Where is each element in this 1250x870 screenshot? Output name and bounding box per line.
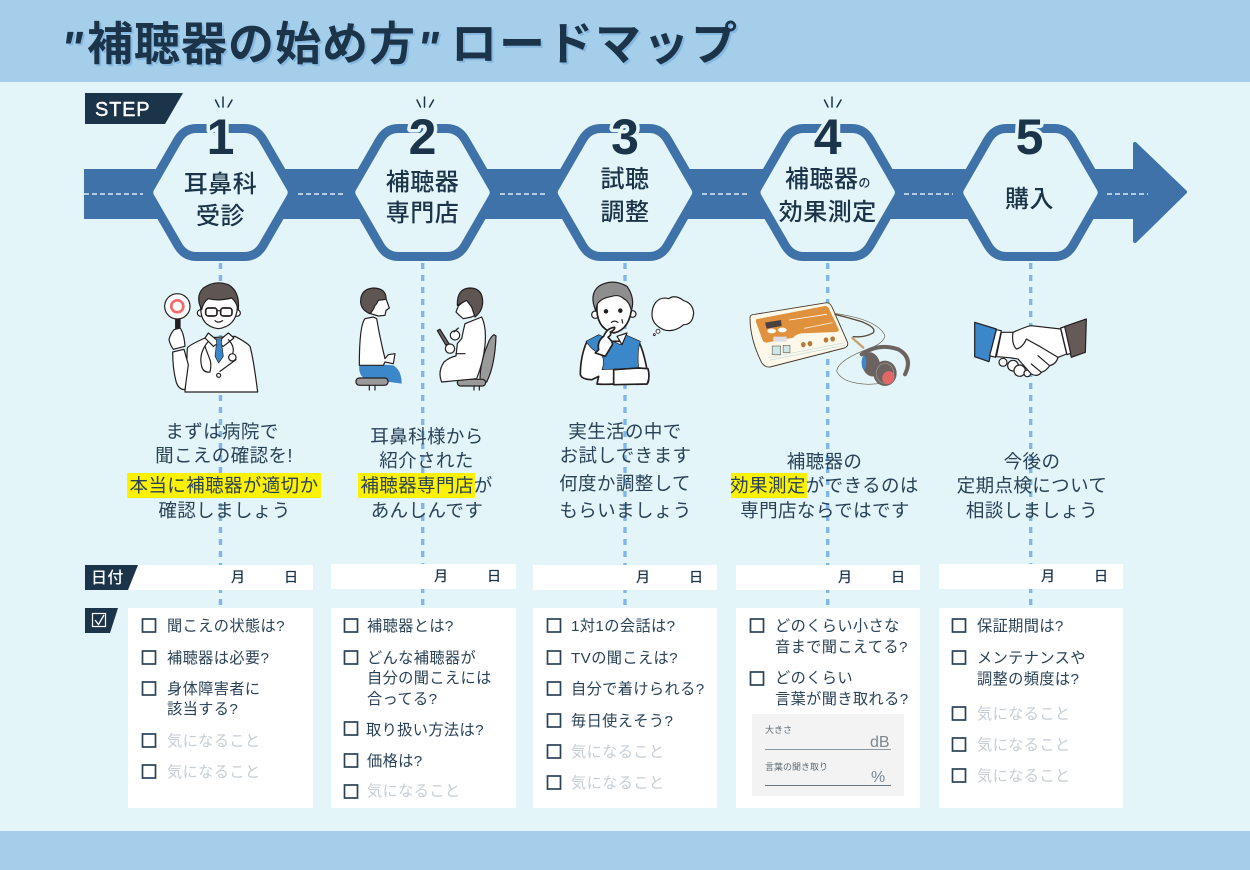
text: step 4 description: 効果測定ができるのは [730,475,919,496]
text: step 1 description: まずは病院で [165,421,279,442]
checklist tag [85,608,118,633]
date row: step 1 [85,565,313,590]
text: step 3 description [559,421,692,521]
checklist: step 1: 気になること [167,764,261,781]
step 4 hexagon [756,109,899,256]
text: step 2 description [360,426,493,521]
checklist: step 3: 気になること [571,744,665,761]
checklist: step 2: 取り扱い方法は? [366,722,484,739]
title: " [417,22,440,74]
text: step 1 description: 確認しましょう [158,500,291,521]
date row: step 1: 日付 [91,569,124,587]
step 3 hexagon [553,109,697,256]
highlight: step 1 [127,473,321,498]
date row: step 5 [939,564,1123,589]
illustration: thinking man [580,282,649,385]
text: step 1 description [129,421,319,521]
checklist: step 4: 言葉が聞き取れる? [775,691,909,708]
checklist: step 5: 保証期間は? [977,618,1064,635]
date row: step 3: 月 [636,569,650,585]
illustration: doctor [165,283,258,392]
date row: step 3 [533,565,717,590]
checklist: step 1: 気になること [167,733,261,750]
checklist: step 2 [331,608,516,808]
checklist: step 2: 価格は? [367,753,423,770]
step 4 hexagon: 4 [814,109,842,165]
checklist: step 1: 補聴器は必要? [167,650,269,667]
checklist: step 4 [736,608,920,808]
text: step 2 description: 補聴器専門店が [360,475,493,496]
highlight: step 4 [731,473,807,498]
checklist: step 2: 合ってる? [367,691,437,708]
text: step 4 description [730,451,919,521]
step 5 hexagon: 購入 [1005,186,1054,213]
date row: step 1: 日 [284,569,298,585]
checklist: step 5: 気になること [977,768,1071,785]
checklist: step 5: 調整の頻度は? [977,671,1079,688]
text: step 5 description: 定期点検について [957,475,1107,496]
step 2 hexagon: 2 [409,109,436,165]
text: step 5 description [957,451,1107,521]
step 3 hexagon: 調整 [600,199,650,226]
step tag [85,93,183,124]
footer band [0,831,1250,870]
icon: spark step 1 [216,97,232,107]
illustration: thought bubble [652,297,694,336]
text: step 5 description: 相談しましょう [966,500,1098,521]
checklist: step 1: 該当する? [167,701,238,718]
header band [0,0,1250,82]
step 2 hexagon [351,109,494,256]
text: step 3 description: もらいましょう [559,500,692,521]
illustration: handshake [975,319,1086,377]
step 3 hexagon: 3 [611,109,639,165]
checklist: step 2: 気になること [367,783,461,800]
title: ロードマップ [451,18,739,70]
checklist: step 4: 音まで聞こえてる? [775,639,908,656]
title: " [61,22,84,74]
measurement box: 言葉の聞き取り [765,761,828,772]
checklist: step 5 [939,608,1123,808]
highlight: step 2 [358,473,475,498]
date row: step 2: 月 [434,568,448,584]
checklist: step 2: 自分の聞こえには [367,670,492,687]
text: step 3 description: 何度か調整して [559,473,691,494]
text: step 1 description: 聞こえの確認を! [155,445,293,466]
checklist: step 1 [128,608,313,808]
checklist: step 3: TVの聞こえは? [571,650,678,667]
checklist: step 1: 聞こえの状態は? [167,618,285,635]
checklist: step 3: 自分で着けられる? [571,681,705,698]
checklist: step 1: 身体障害者に [167,681,261,698]
checklist: step 3: 気になること [571,775,665,792]
measurement box: 大きさ [765,724,792,735]
icon: spark step 4 [824,97,841,107]
text: step 1 description: 本当に補聴器が適切か [129,475,319,496]
step 1 hexagon [149,109,292,256]
text: step 2 description: 紹介された [379,450,474,471]
step 4 hexagon: 効果測定 [779,199,877,226]
measurement box [752,714,904,796]
text: step 4 description: 補聴器の [787,451,862,472]
illustration: audiometer and headphones [750,303,908,386]
date row: step 1: 月 [231,569,245,585]
checklist: step 4: どのくらい小さな [775,618,900,635]
step 3 hexagon: 試聴 [600,166,650,193]
checklist: step 3 [533,608,717,808]
step 4 hexagon: 補聴器の [785,166,870,193]
step 5 hexagon: 5 [1016,109,1043,165]
step 1 hexagon: 受診 [196,203,245,230]
checklist: step 5: 気になること [977,706,1071,723]
text: step 3 description: 実生活の中で [568,421,682,442]
step 5 hexagon [959,109,1102,256]
measurement box: % [871,769,885,786]
date row: step 5: 日 [1094,568,1108,584]
date row: step 4: 日 [891,569,905,585]
date row: step 4 [736,565,920,590]
date row: step 4: 月 [838,569,852,585]
checklist: step 4: どのくらい [775,670,853,687]
checklist: step 5: 気になること [977,737,1071,754]
date row: step 2: 日 [487,568,501,584]
title [61,18,739,74]
date row: step 2 [331,564,516,589]
measurement box: dB [870,734,890,751]
date row: step 5: 月 [1041,568,1055,584]
step 1 hexagon: 1 [207,109,234,165]
step 2 hexagon: 専門店 [386,200,459,227]
text: step 2 description: 耳鼻科様から [370,426,484,447]
checklist: step 2: 補聴器とは? [367,618,454,635]
step 1 hexagon: 耳鼻科 [184,171,257,198]
date row: step 3: 日 [689,569,703,585]
step 2 hexagon: 補聴器 [386,169,459,196]
text: step 4 description: 専門店ならではです [740,500,910,521]
dotted connector lines [220,263,1031,608]
illustration: consultation [356,288,496,390]
step tag: STEP [95,99,150,121]
text: step 3 description: お試しできます [560,445,691,466]
text: step 2 description: あんしんです [371,500,483,521]
icon: spark step 2 [417,97,434,107]
roadmap arrow [84,144,1185,241]
checklist: step 5: メンテナンスや [977,650,1086,667]
checklist: step 3: 毎日使えそう? [571,713,673,730]
checklist: step 3: 1対1の会話は? [571,618,675,635]
checklist: step 2: どんな補聴器が [367,650,476,667]
title: 補聴器の始め方 [87,18,416,70]
text: step 5 description: 今後の [1004,451,1060,472]
